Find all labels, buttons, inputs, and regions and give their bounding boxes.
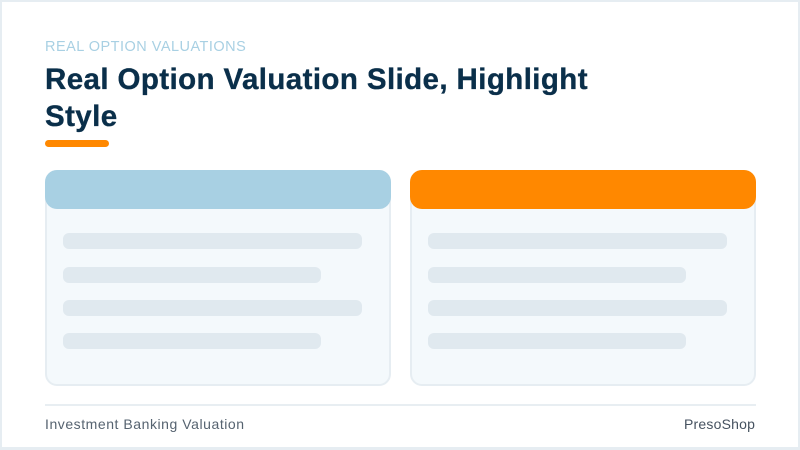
title: Style [45,100,118,133]
panel: left card [45,170,391,386]
footer right brand: PresoShop [684,416,755,432]
right placeholder line 4 [428,333,686,349]
title: Real Option Valuation Slide, Highlight [45,63,588,96]
left card body [45,170,391,386]
right placeholder line 3 [428,300,727,316]
panel: right card [410,170,756,386]
right card orange header [410,170,756,209]
footer left text: Investment Banking Valuation [45,416,245,432]
left placeholder line 1 [63,233,362,249]
right card body [410,170,756,386]
left placeholder line 2 [63,267,321,283]
title [45,63,588,133]
right placeholder line 1 [428,233,727,249]
left placeholder line 4 [63,333,321,349]
title accent underline [45,140,109,147]
eyebrow label: REAL OPTION VALUATIONS [45,39,246,55]
left placeholder line 3 [63,300,362,316]
left card blue header [45,170,391,209]
right placeholder line 2 [428,267,686,283]
